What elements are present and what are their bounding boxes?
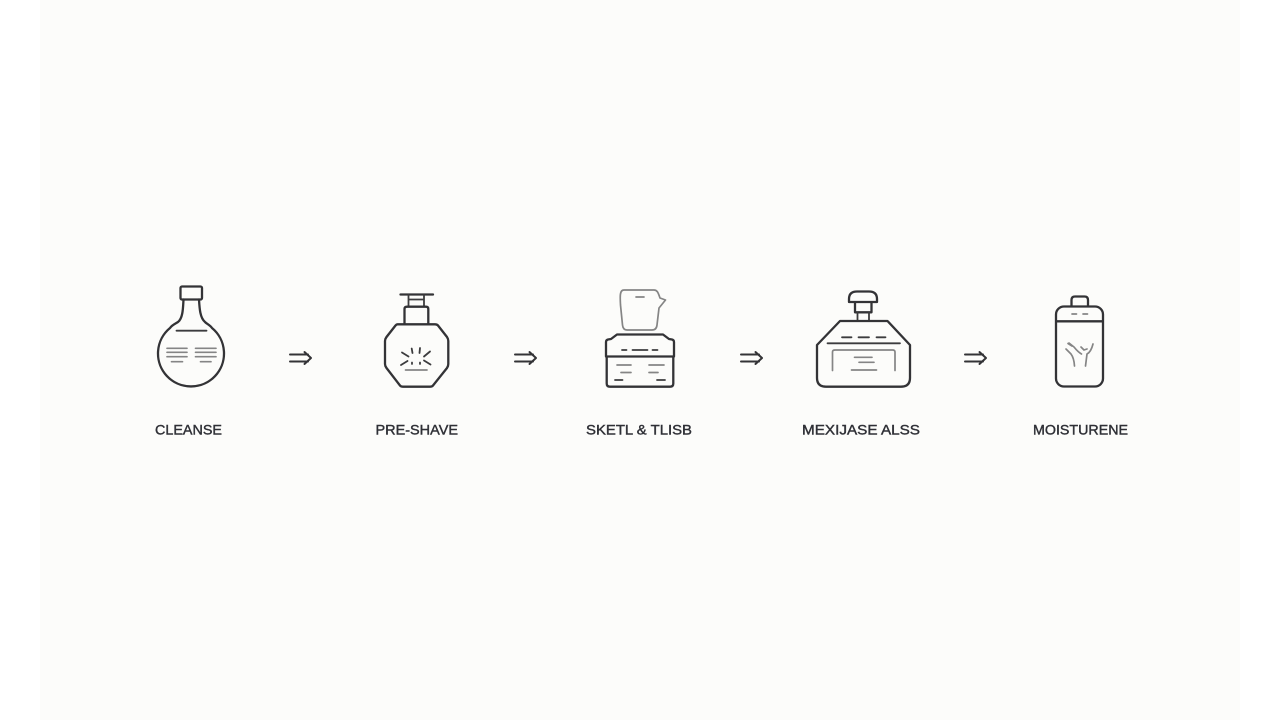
arrow 4	[965, 352, 986, 364]
label: mexijase alss: MEXIJASE ALSS	[802, 422, 920, 438]
step 5: moisturene	[1033, 296, 1128, 438]
label: cleanse: CLEANSE	[155, 422, 222, 438]
step 3: sketl & tlisb	[586, 290, 692, 438]
arrow 2	[515, 352, 536, 364]
step 1: cleanse	[155, 286, 224, 438]
icon: wide bottle with cap	[817, 292, 910, 387]
icon: round flask bottle	[158, 286, 224, 386]
label: moisturene: MOISTURENE	[1033, 422, 1128, 438]
icon: pump bottle	[385, 294, 448, 387]
step 4: mexijase alss	[802, 292, 920, 438]
arrow 1	[290, 352, 311, 364]
step 2: pre-shave	[376, 294, 458, 438]
label: pre-shave: PRE-SHAVE	[376, 422, 458, 438]
icon: tall cylinder bottle	[1056, 296, 1103, 386]
icon: cup over jar	[606, 290, 674, 387]
arrow 3	[741, 352, 762, 364]
label: sketl & tlisb: SKETL & TLISB	[586, 422, 692, 438]
